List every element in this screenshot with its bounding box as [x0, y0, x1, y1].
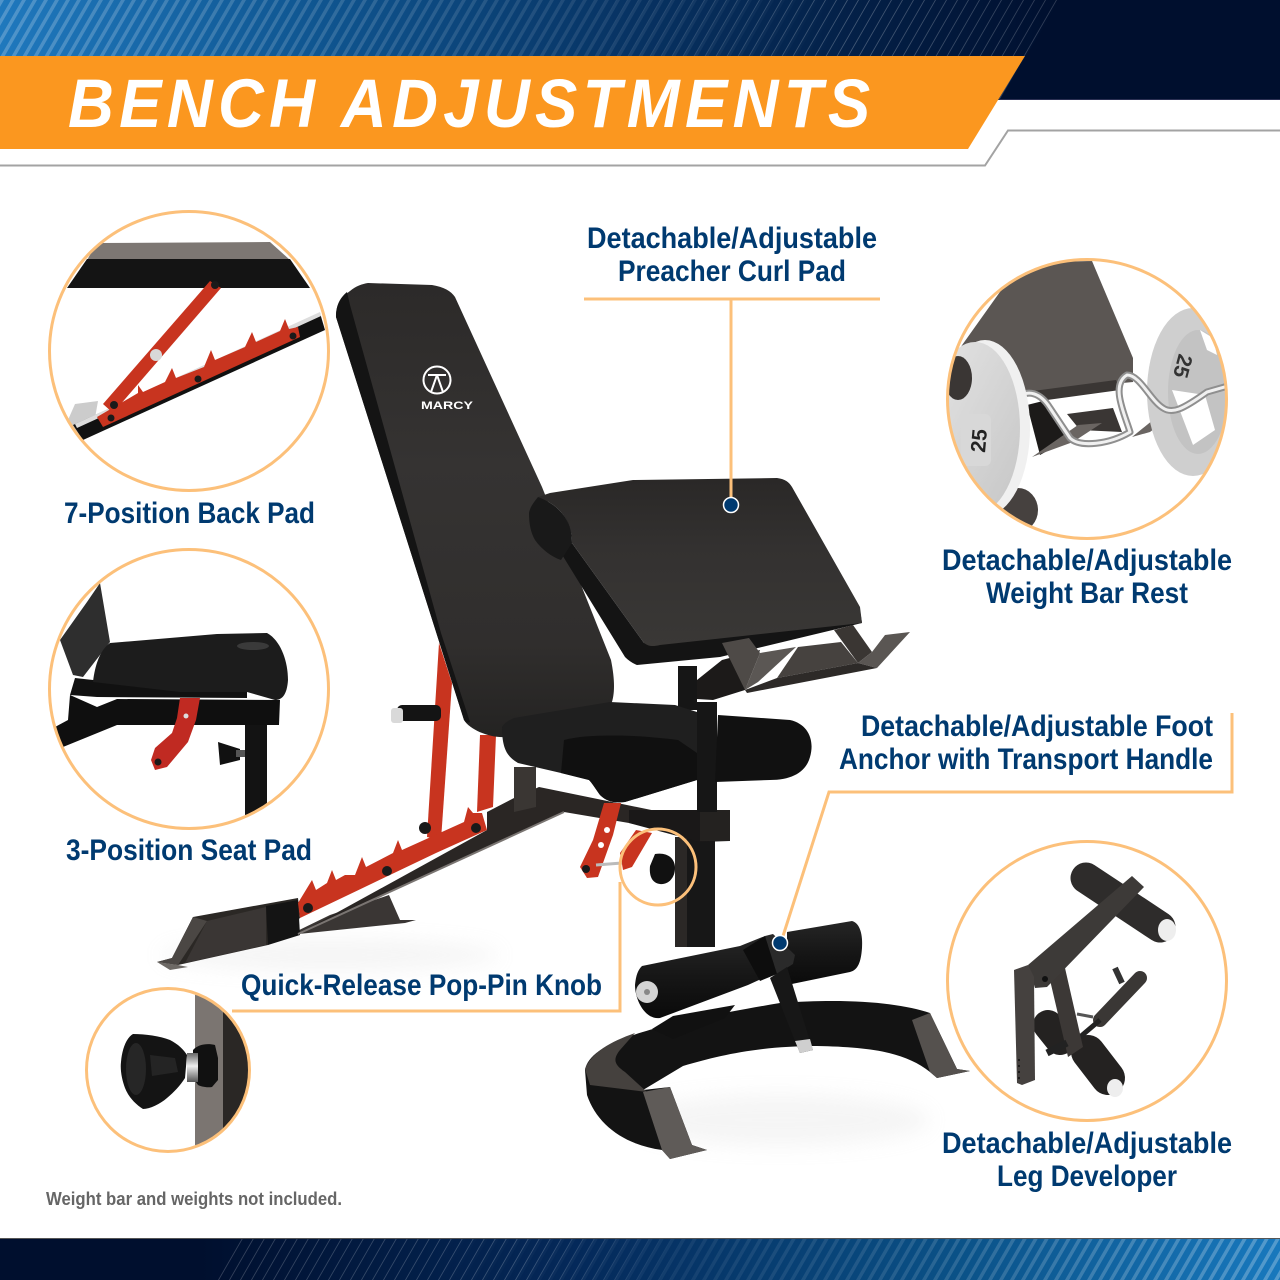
footer band	[0, 1238, 1280, 1280]
inset: weight bar rest: 25	[1168, 352, 1196, 381]
preacher curl pad	[529, 478, 862, 665]
label: weight bar rest: Weight Bar Rest	[986, 577, 1188, 610]
label: preacher curl pad	[587, 222, 877, 288]
photo: adjustable bench	[157, 283, 970, 1159]
back pad	[336, 283, 614, 737]
lower column	[629, 810, 730, 947]
seat support post	[514, 767, 536, 812]
label: back pad: 7-Position Back Pad	[64, 497, 315, 530]
label: foot anchor: Detachable/Adjustable Foot	[861, 710, 1213, 743]
inset: weight bar rest: 25	[967, 428, 992, 453]
inset: weight bar rest	[930, 259, 1239, 539]
inset: leg developer	[940, 841, 1227, 1121]
seat adjustment arms	[580, 803, 652, 878]
orange title banner	[0, 56, 1025, 149]
header band	[0, 0, 1280, 100]
marker circle on pop-pin knob	[620, 829, 696, 905]
red adjustment rail	[298, 807, 487, 918]
base U frame	[585, 1001, 970, 1159]
callout line: preacher curl pad	[584, 299, 880, 512]
leg developer on bench	[635, 921, 862, 1053]
label: foot anchor: Anchor with Transport Handle	[839, 743, 1213, 776]
callout line: pop-pin knob	[232, 882, 620, 1011]
inset: seat pad	[49, 549, 329, 829]
back pad handle	[391, 705, 441, 723]
label: preacher curl pad: Detachable/Adjustable	[587, 222, 877, 255]
upper post	[678, 666, 717, 812]
floor shadows	[160, 939, 930, 1146]
footnote: Weight bar and weights not included.	[46, 1189, 342, 1209]
preacher pad rests	[697, 625, 910, 700]
label: seat pad: 3-Position Seat Pad	[66, 834, 312, 867]
label: weight bar rest	[942, 544, 1232, 610]
rear foot	[157, 895, 416, 970]
label: leg developer: Leg Developer	[997, 1160, 1177, 1193]
seat pad	[502, 702, 812, 802]
label: pop-pin knob: Quick-Release Pop-Pin Knob	[241, 969, 602, 1002]
label: leg developer: Detachable/Adjustable	[942, 1127, 1232, 1160]
main incline beam	[298, 787, 700, 934]
label: preacher curl pad: Preacher Curl Pad	[618, 255, 846, 288]
label: weight bar rest: Detachable/Adjustable	[942, 544, 1232, 577]
label: foot anchor	[839, 710, 1213, 776]
inset: back pad	[49, 211, 329, 491]
rear red uprights	[427, 643, 496, 840]
Marcy logo: MARCY	[421, 400, 474, 412]
Marcy logo	[421, 366, 474, 412]
label: leg developer	[942, 1127, 1232, 1193]
inset: pop-pin knob	[86, 985, 255, 1155]
header rule	[0, 130, 1280, 166]
title: BENCH ADJUSTMENTS	[68, 66, 870, 143]
callout line: foot anchor	[772, 713, 1232, 950]
